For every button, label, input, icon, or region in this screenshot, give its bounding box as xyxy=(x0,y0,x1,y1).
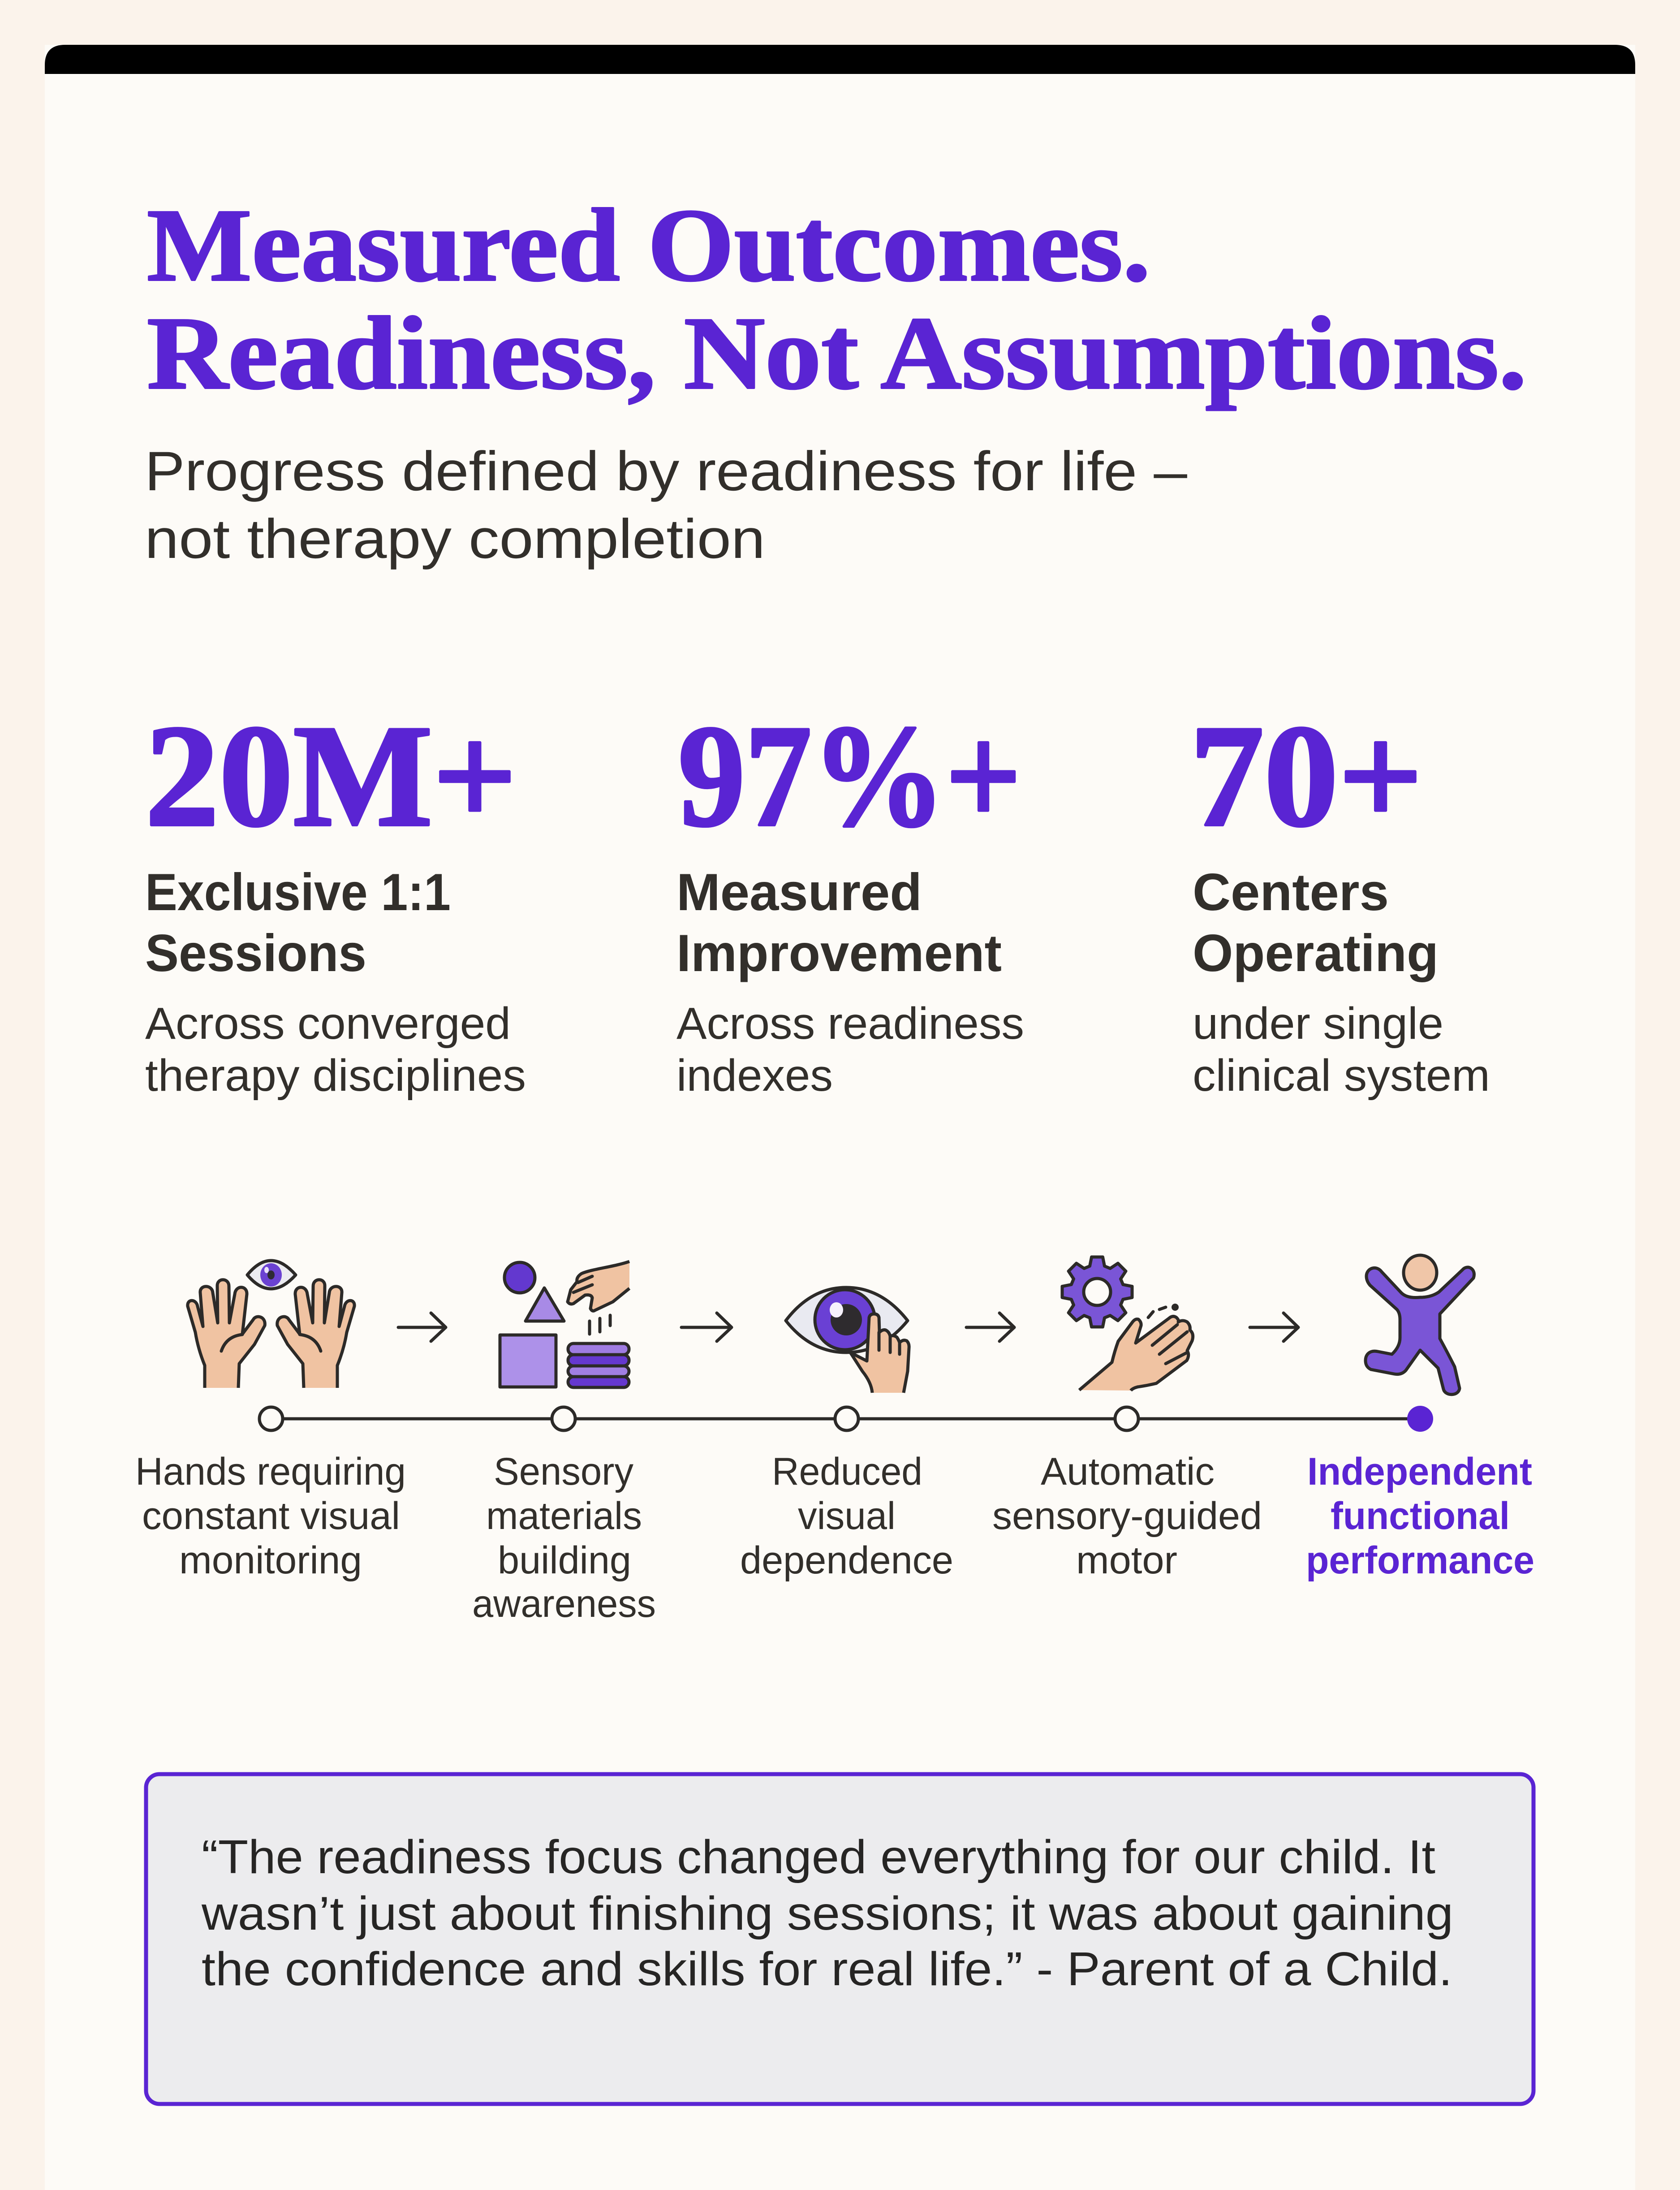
stat: 70+ centers: 70+ xyxy=(1190,695,1423,857)
node 5 active xyxy=(1407,1406,1433,1432)
stat: 97%+ improvement: indexes xyxy=(676,1050,833,1101)
stat: 70+ centers: clinical system xyxy=(1193,1050,1490,1101)
arrow 4 xyxy=(1250,1313,1298,1341)
node 2 xyxy=(552,1407,575,1430)
title: Measured Outcomes. xyxy=(147,188,1150,303)
quote text: the confidence and skills for real life.” - Parent of a Child. xyxy=(202,1943,1452,1996)
step label 2: building xyxy=(498,1539,631,1582)
stat: 20M+ sessions: 20M+ xyxy=(145,695,517,857)
stat: 20M+ sessions: therapy disciplines xyxy=(145,1050,526,1101)
arrow 1 xyxy=(398,1313,446,1341)
subtitle: Progress defined by readiness for life – xyxy=(145,441,1187,502)
arrow 3 xyxy=(966,1313,1014,1341)
step label 4: sensory-guided xyxy=(992,1495,1262,1538)
stat: 70+ centers: Centers xyxy=(1193,863,1389,921)
step label 5 highlighted: performance xyxy=(1306,1539,1534,1582)
timeline xyxy=(259,1406,1433,1432)
node 1 xyxy=(259,1407,283,1430)
icon: hands with eye xyxy=(188,1261,354,1388)
title xyxy=(147,188,1527,411)
quote text xyxy=(201,1831,1453,1996)
arrow 2 xyxy=(681,1313,732,1341)
step label 2: materials xyxy=(486,1495,642,1538)
step label 3: dependence xyxy=(740,1539,953,1582)
node 3 xyxy=(835,1407,858,1430)
step label 1: monitoring xyxy=(179,1539,362,1582)
step label 5 highlighted: Independent xyxy=(1307,1450,1532,1493)
stat: 70+ centers xyxy=(1190,695,1490,1101)
top black bar xyxy=(45,45,1635,74)
quote text: “The readiness focus changed everything for our child. It xyxy=(202,1831,1435,1883)
left hand xyxy=(188,1280,265,1388)
right hand xyxy=(277,1280,354,1388)
callout: parent quote xyxy=(146,1774,1534,2104)
step label 2: Sensory xyxy=(494,1450,633,1493)
stat: 97%+ improvement: 97%+ xyxy=(678,695,1021,857)
step label 4: Automatic xyxy=(1041,1450,1215,1493)
icon: independent jumping person xyxy=(1366,1255,1474,1395)
stat: 97%+ improvement: Improvement xyxy=(676,924,1002,982)
title: Readiness, Not Assumptions. xyxy=(147,296,1527,411)
step label 1: constant visual xyxy=(142,1495,400,1538)
step label 5 highlighted xyxy=(1306,1450,1534,1582)
eye above hands xyxy=(247,1261,296,1289)
icon: gear and hand xyxy=(1062,1257,1193,1391)
step label 2 xyxy=(472,1450,656,1625)
subtitle: not therapy completion xyxy=(145,508,765,570)
stat: 20M+ sessions: Sessions xyxy=(145,924,366,982)
stat: 97%+ improvement xyxy=(676,695,1024,1101)
quote text: wasn’t just about finishing sessions; it was about gaining xyxy=(201,1887,1453,1940)
step label 5 highlighted: functional xyxy=(1331,1495,1510,1538)
stat: 70+ centers: Operating xyxy=(1193,924,1439,982)
step label 2: awareness xyxy=(472,1582,656,1625)
step label 4: motor xyxy=(1076,1539,1177,1582)
stat: 70+ centers: under single xyxy=(1193,998,1443,1049)
step label 3 xyxy=(740,1450,953,1582)
stat: 97%+ improvement: Across readiness xyxy=(676,998,1024,1049)
step label 4 xyxy=(992,1450,1262,1582)
stat: 97%+ improvement: Measured xyxy=(676,863,922,921)
subtitle xyxy=(145,441,1187,570)
step label 3: Reduced xyxy=(772,1450,922,1493)
stat: 20M+ sessions: Exclusive 1:1 xyxy=(145,863,451,921)
pointing hand xyxy=(850,1314,909,1393)
step label 3: visual xyxy=(798,1495,896,1538)
icon: sensory materials and hand xyxy=(500,1261,629,1387)
step label 1 xyxy=(135,1450,406,1582)
step label 1: Hands requiring xyxy=(135,1450,406,1493)
icon: eye with finger xyxy=(786,1287,909,1393)
stat: 20M+ sessions xyxy=(145,695,526,1101)
node 4 xyxy=(1115,1407,1138,1430)
stat: 20M+ sessions: Across converged xyxy=(145,998,511,1049)
